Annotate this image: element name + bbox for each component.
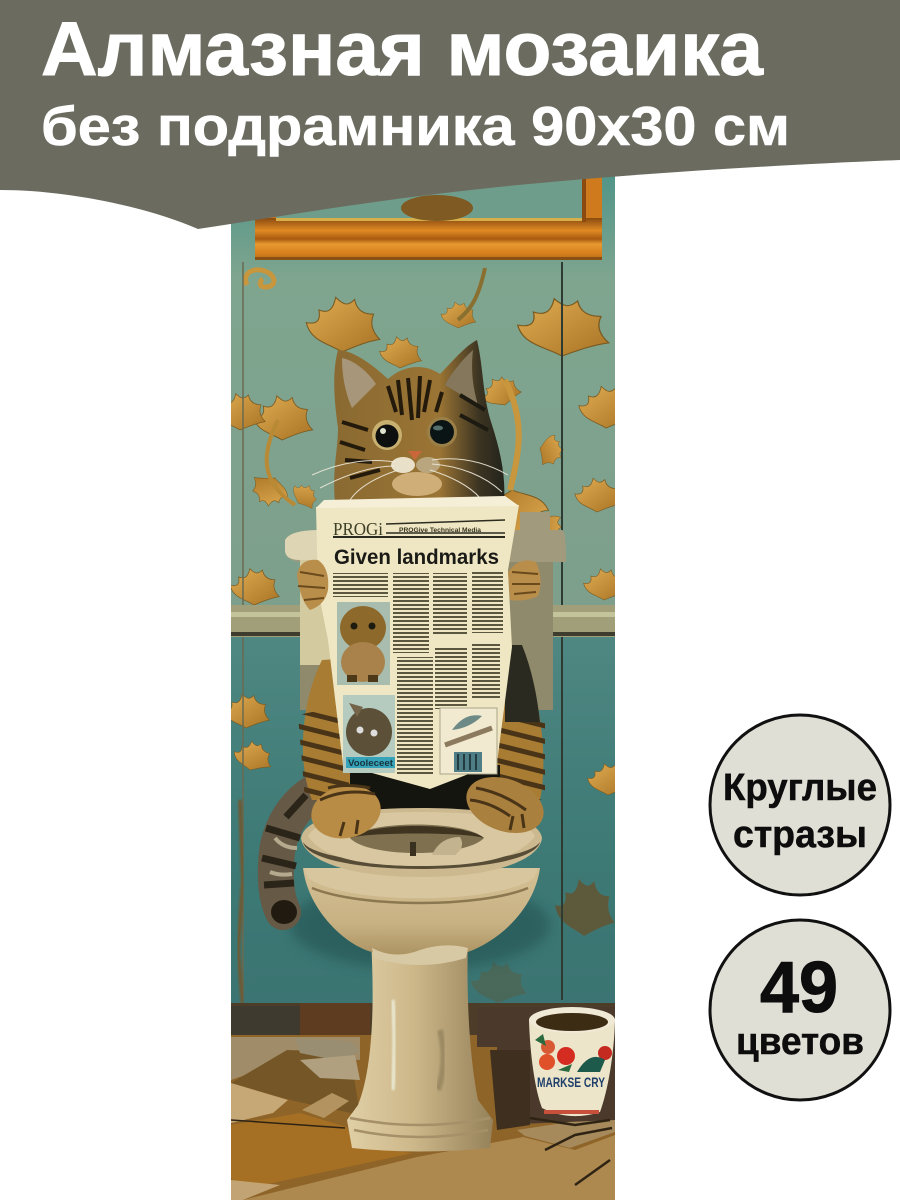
cat whiskers: [312, 459, 508, 500]
badge: round rhinestones: стразы: [733, 814, 867, 856]
newspaper cat photo 1: [337, 602, 390, 685]
cat paws holding newspaper: [297, 560, 541, 610]
shadow beneath bowl: [290, 898, 551, 969]
badge: round rhinestones: Круглые: [723, 767, 877, 809]
dark wall leaves: [471, 879, 615, 1003]
picture frame: [255, 170, 602, 260]
cat forehead stripes: [340, 376, 488, 478]
gold wallpaper flowers: [216, 268, 635, 795]
cat eyes: [372, 417, 457, 450]
cat ears inner: [342, 358, 376, 408]
cat body: [298, 645, 545, 812]
crack on left wall: [238, 800, 243, 1005]
newspaper cat photo 2: [343, 695, 395, 773]
title: Алмазная мозаика: [41, 7, 764, 92]
chair rail: [231, 605, 615, 637]
newspaper cat photo 2: Vooleceet: [348, 758, 393, 768]
badge: 49 colours: цветов: [736, 1021, 864, 1063]
coffee mug: [529, 1007, 615, 1116]
newspaper: [316, 496, 519, 789]
newspaper columns: [333, 572, 503, 775]
toilet tank: [285, 512, 566, 710]
cat muzzle: [391, 451, 442, 496]
toilet bowl: [303, 868, 540, 965]
newspaper advert: [440, 708, 497, 774]
cat tail: [262, 790, 318, 924]
masthead: [333, 519, 505, 539]
toilet pedestal: [347, 940, 493, 1152]
badge: 49 colours: [710, 920, 890, 1100]
newspaper headline: Given landmarks: [334, 545, 499, 569]
cat front paws: [311, 777, 544, 838]
skirting: [231, 1003, 615, 1038]
subtitle: без подрамника 90х30 см: [41, 95, 790, 157]
mug flowers: [535, 1034, 612, 1072]
upper wall: [231, 170, 615, 610]
lower wall: [231, 635, 615, 1010]
mug label: MARKSE CRY: [537, 1074, 605, 1090]
masthead: PROGi: [333, 519, 383, 539]
panel seams: [243, 262, 562, 1000]
badge: round rhinestones: [710, 715, 890, 895]
floor: [231, 1035, 615, 1200]
badge: 49 colours: 49: [760, 948, 838, 1028]
cat head: [312, 340, 508, 503]
painting: cat on toilet: [216, 170, 635, 1200]
header banner: [0, 0, 900, 229]
toilet seat: [301, 808, 542, 877]
masthead: PROGive Technical Media: [399, 527, 481, 534]
